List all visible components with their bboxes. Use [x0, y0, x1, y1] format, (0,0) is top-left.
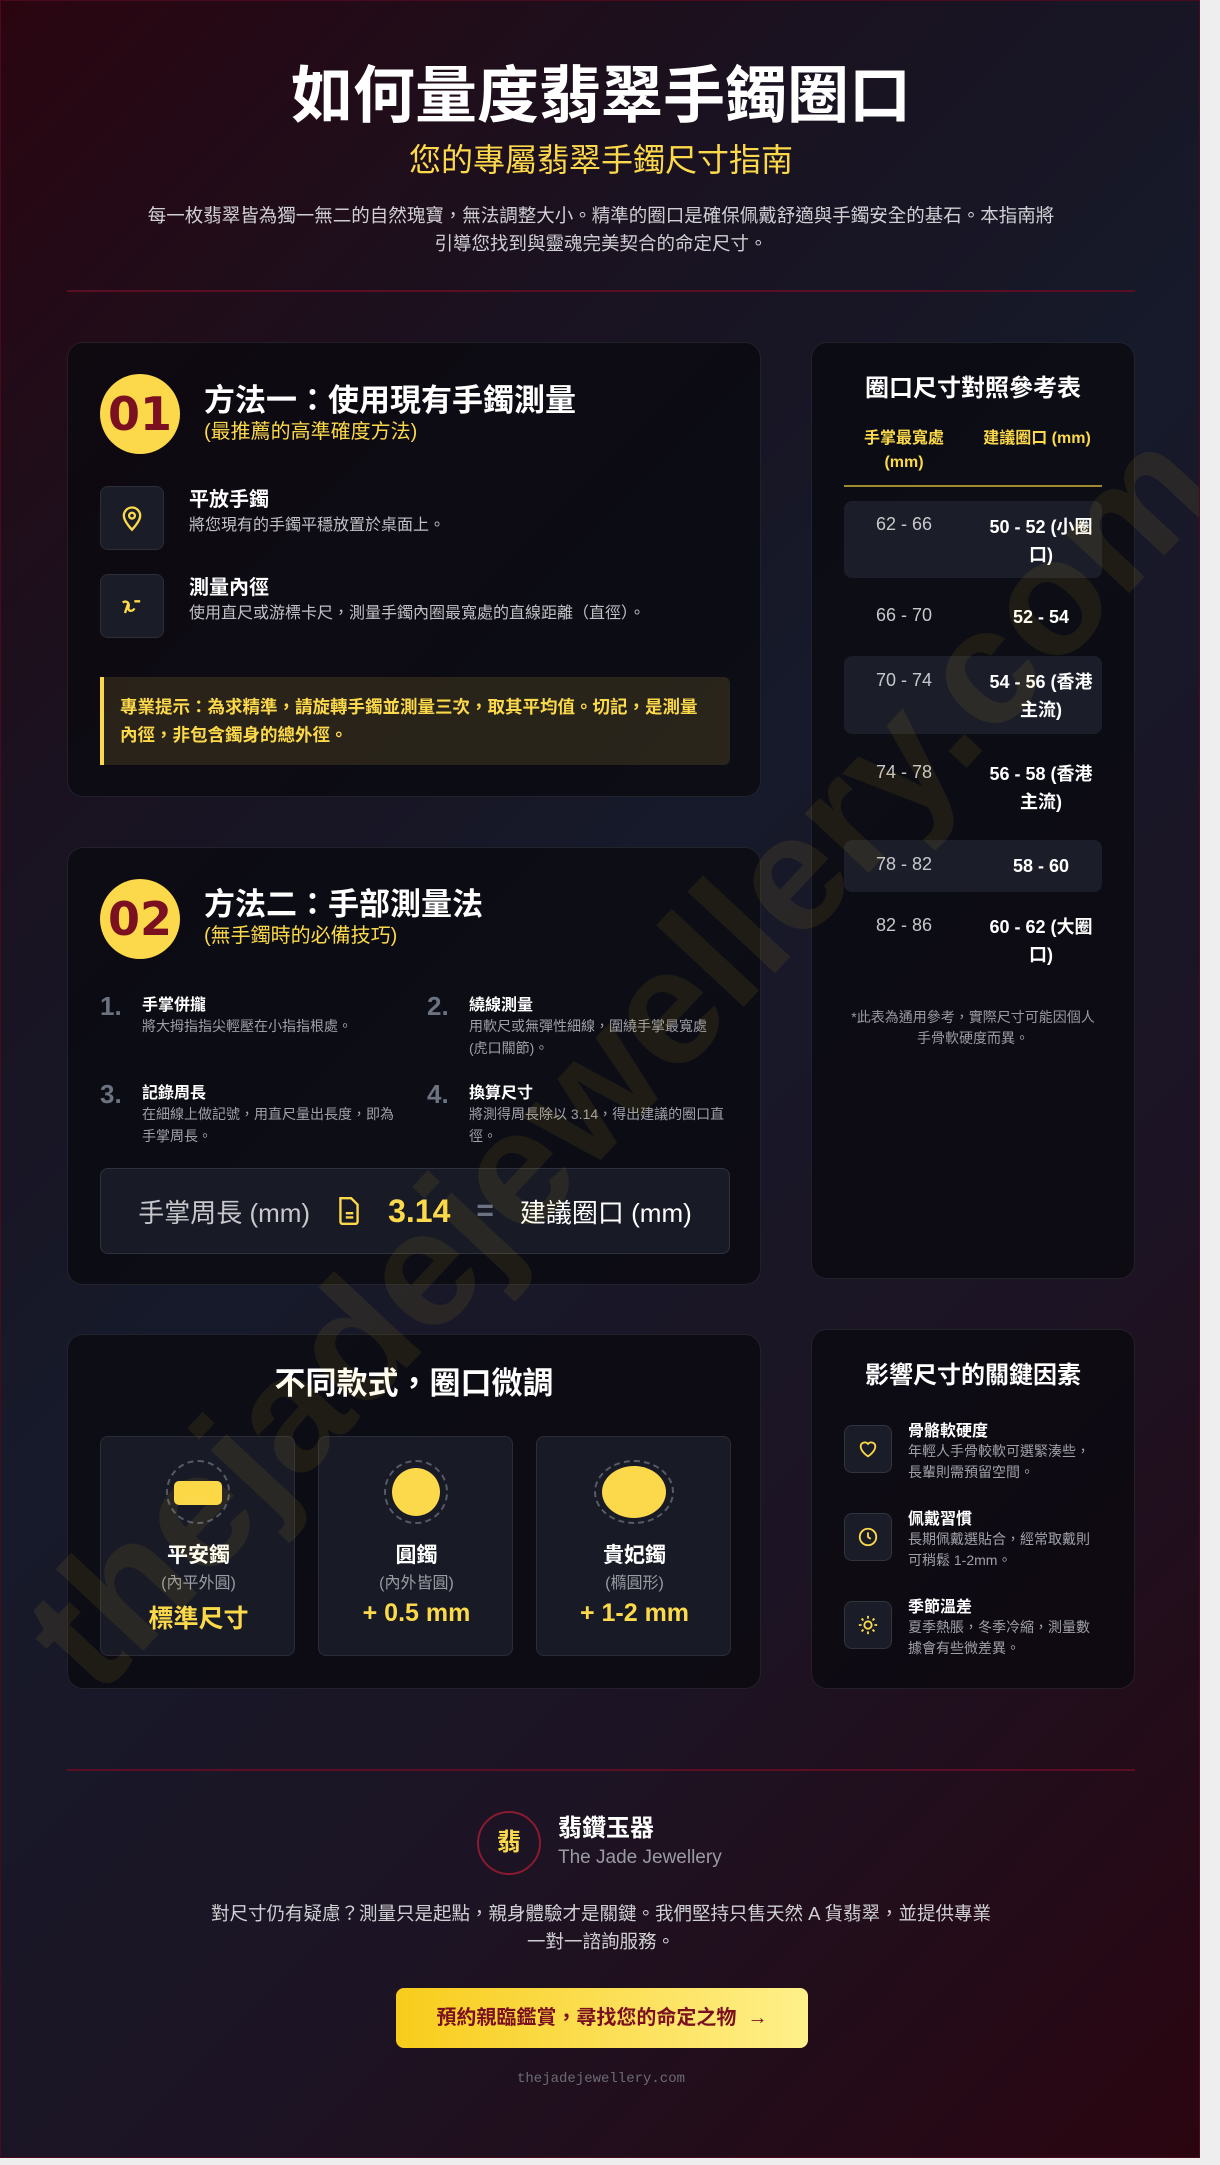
badge 02: 02	[108, 892, 172, 946]
card: round: 圓鐲	[396, 1544, 438, 1567]
formula box: 3.14	[388, 1192, 450, 1228]
footer text	[211, 1903, 991, 1952]
text: 2.	[427, 991, 449, 1021]
text: 年輕人手骨較軟可選緊湊些，長輩則需預留空間。	[908, 1443, 1090, 1480]
card: gui fei	[536, 1436, 731, 1656]
table rows	[504, 501, 1124, 1156]
icon: measure	[100, 574, 164, 638]
step: inner diameter: 使用直尺或游標卡尺，測量手鐲內圈最寬處的直線距離（直徑）。	[189, 605, 645, 622]
icon: heart	[844, 1425, 892, 1473]
table header: 建議圈口 (mm)	[983, 430, 1091, 447]
step 1	[100, 991, 352, 1034]
text: 66 - 70	[876, 605, 932, 625]
step 3	[100, 1079, 394, 1144]
method 2 subheading: (無手鐲時的必備技巧)	[204, 925, 397, 947]
text: 56 - 58 (香港主流)	[989, 764, 1093, 812]
panel: styles	[67, 1334, 761, 1689]
card: ping an: 標準尺寸	[148, 1605, 248, 1633]
text: 4.	[427, 1079, 449, 1109]
factor: habit	[908, 1510, 1090, 1568]
card: round	[318, 1436, 513, 1656]
panel: factors	[811, 1329, 1135, 1689]
subtitle: 您的專屬翡翠手鐲尺寸指南	[409, 142, 793, 178]
text: 62 - 66	[876, 514, 932, 534]
card: gui fei: + 1-2 mm	[580, 1599, 689, 1627]
method 2 heading: 方法二：手部測量法	[204, 887, 483, 922]
brand name: 翡鑽玉器	[558, 1815, 654, 1842]
method 1 heading: 方法一：使用現有手鐲測量	[204, 383, 576, 418]
text: 82 - 86	[876, 915, 932, 935]
step: flat bracelet: 將您現有的手鐲平穩放置於桌面上。	[189, 517, 445, 534]
step: inner diameter	[189, 576, 645, 622]
url: thejadejewellery.com	[517, 2071, 685, 2087]
formula box: 建議圈口 (mm)	[520, 1198, 692, 1228]
logo: 翡	[497, 1829, 521, 1856]
logo	[477, 1811, 541, 1875]
formula box	[100, 1168, 730, 1254]
text: 在細線上做記號，用直尺量出長度，即為手掌周長。	[142, 1106, 394, 1144]
step: flat bracelet: 平放手鐲	[189, 489, 269, 511]
badge 01	[100, 374, 180, 454]
text: 長期佩戴選貼合，經常取戴則可稍鬆 1-2mm。	[908, 1531, 1090, 1568]
panel: method 1	[67, 342, 761, 797]
text: 夏季熱脹，冬季冷縮，測量數據會有些微差異。	[908, 1619, 1090, 1656]
card: round: + 0.5 mm	[363, 1599, 470, 1627]
step: inner diameter: 測量內徑	[189, 577, 269, 599]
text: 70 - 74	[876, 670, 932, 690]
card: round: (內外皆圓)	[379, 1575, 454, 1592]
title: 如何量度翡翠手鐲圈口	[291, 62, 911, 131]
card: ping an: 平安鐲	[167, 1544, 230, 1567]
footer text: 對尺寸仍有疑慮？測量只是起點，親身體驗才是關鍵。我們堅持只售天然 A 貨翡翠，並提供專業	[211, 1903, 991, 1924]
text: 將測得周長除以 3.14，得出建議的圈口直徑。	[469, 1106, 724, 1144]
table header: (mm)	[884, 454, 924, 471]
step 2	[427, 991, 707, 1056]
intro text: 引導您找到與靈魂完美契合的命定尺寸。	[434, 233, 768, 254]
callout: pro tip: 專業提示：為求精準，請旋轉手鐲並測量三次，取其平均值。切記，是測量內徑，非包含鐲身的總外徑。	[120, 697, 698, 745]
text: 手掌併攏	[142, 997, 206, 1014]
text: 繞線測量	[469, 997, 533, 1014]
button: CTA: 預約親臨鑑賞，尋找您的命定之物 →	[436, 2007, 768, 2029]
text: 1.	[100, 991, 122, 1021]
icon: clock	[844, 1513, 892, 1561]
callout: pro tip	[100, 677, 730, 765]
panel: method 2	[67, 847, 761, 1285]
card: ping an	[100, 1436, 295, 1656]
card: gui fei: 貴妃鐲	[603, 1544, 666, 1567]
step: flat bracelet	[189, 488, 445, 534]
icon: document	[339, 1197, 359, 1225]
text: 52 - 54	[1013, 607, 1069, 627]
text: 用軟尺或無彈性細線，圍繞手掌最寬處(虎口關節)。	[469, 1018, 707, 1056]
text: 54 - 56 (香港主流)	[989, 672, 1093, 720]
method 1 subheading: (最推薦的高準確度方法)	[204, 421, 417, 443]
formula box: 手掌周長 (mm)	[138, 1198, 310, 1228]
intro text: 每一枚翡翠皆為獨一無二的自然瑰寶，無法調整大小。精準的圈口是確保佩戴舒適與手鐲安全的基石。本指南將	[148, 205, 1054, 226]
button: CTA	[396, 1988, 808, 2048]
icon: location pin	[100, 486, 164, 550]
icon: sun	[844, 1601, 892, 1649]
text: 骨骼軟硬度	[908, 1423, 988, 1440]
text: 3.	[100, 1079, 122, 1109]
styles heading: 不同款式，圈口微調	[274, 1366, 554, 1401]
text: 記錄周長	[142, 1085, 206, 1102]
badge 02	[100, 879, 180, 959]
text: 季節溫差	[908, 1599, 972, 1616]
factor: bone	[908, 1422, 1090, 1480]
factors heading: 影響尺寸的關鍵因素	[865, 1362, 1081, 1389]
text: 74 - 78	[876, 762, 932, 782]
text: 60 - 62 (大圈口)	[989, 917, 1093, 965]
formula box: =	[476, 1194, 494, 1227]
card: ping an: (內平外圓)	[161, 1575, 236, 1592]
panel: size chart	[811, 342, 1135, 1279]
text: 換算尺寸	[469, 1085, 533, 1102]
chart note: *此表為通用參考，實際尺寸可能因個人手骨軟硬度而異。	[851, 1009, 1095, 1046]
text: 50 - 52 (小圈口)	[989, 517, 1093, 565]
intro text	[148, 205, 1054, 254]
table header: 手掌最寬處	[864, 430, 944, 447]
text: 佩戴習慣	[908, 1511, 972, 1528]
text: 78 - 82	[876, 854, 932, 874]
card: gui fei: (橢圓形)	[605, 1575, 664, 1592]
footer text: 一對一諮詢服務。	[527, 1931, 675, 1952]
brand name	[558, 1815, 722, 1868]
table header	[844, 427, 1102, 487]
factor: season	[908, 1598, 1090, 1656]
text: 將大拇指指尖輕壓在小指指根處。	[142, 1018, 352, 1034]
badge 01: 01	[108, 387, 172, 441]
chart heading: 圈口尺寸對照參考表	[865, 375, 1081, 402]
brand name: The Jade Jewellery	[558, 1847, 722, 1868]
text: 58 - 60	[1013, 856, 1069, 876]
step 4	[427, 1079, 724, 1144]
